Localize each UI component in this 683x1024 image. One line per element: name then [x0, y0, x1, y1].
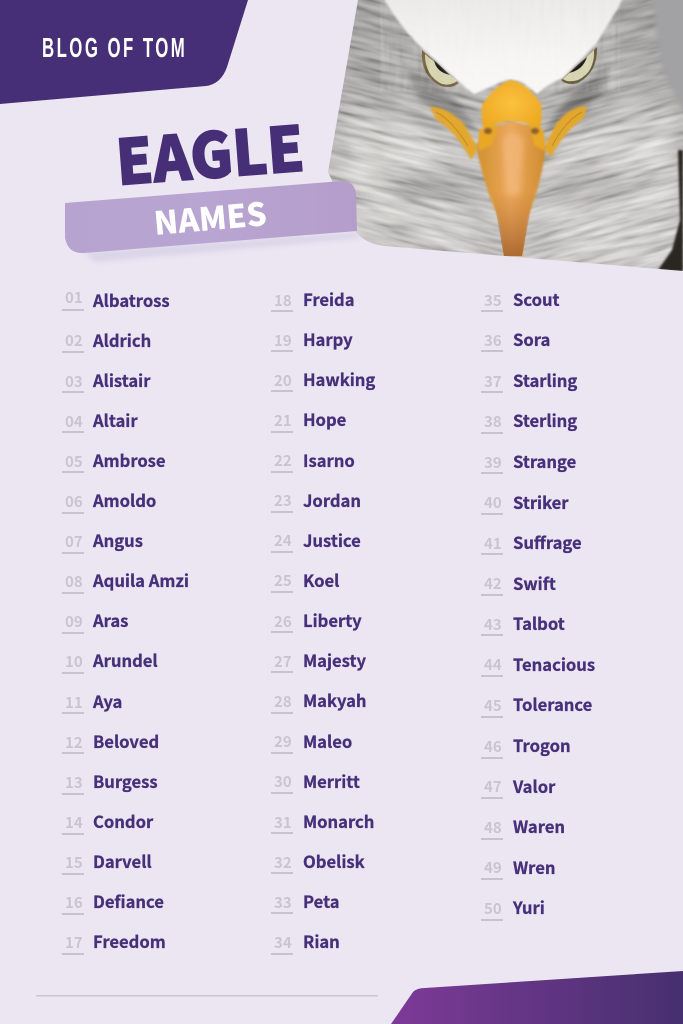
names column 2 — [271, 287, 375, 955]
name 10: 10 — [65, 651, 83, 672]
name 12: 12 — [65, 732, 83, 753]
name 19: 19 — [274, 330, 292, 351]
name 07 — [62, 528, 143, 554]
name 29: Maleo — [303, 729, 352, 753]
name 07: Angus — [92, 528, 143, 552]
header panel: blog brand — [0, 0, 248, 104]
dark feathers at right edge — [658, 150, 683, 272]
studio backdrop — [652, 0, 683, 116]
name 31: 31 — [274, 812, 292, 833]
name 31 — [271, 809, 374, 834]
name 28: Makyah — [303, 688, 367, 712]
name 06: Amoldo — [92, 488, 156, 512]
name 34: Rian — [303, 929, 340, 953]
name 38: Sterling — [513, 408, 577, 432]
name 02: 02 — [65, 330, 83, 351]
name 26: 26 — [274, 611, 292, 632]
name 39 — [481, 449, 576, 474]
name 01: Albatross — [92, 288, 170, 312]
name 45: Tolerance — [513, 692, 592, 716]
name 04 — [62, 408, 138, 433]
name 33: 33 — [274, 892, 292, 913]
name 32: 32 — [274, 852, 292, 873]
name 50: 50 — [484, 898, 502, 919]
name 05 — [62, 448, 166, 473]
name 32: Obelisk — [303, 849, 365, 873]
name 03 — [62, 368, 151, 393]
name 43: 43 — [484, 614, 502, 635]
name 17: Freedom — [93, 929, 166, 953]
name 24: 24 — [274, 530, 292, 551]
name 20 — [271, 367, 375, 392]
name 11 — [62, 689, 122, 714]
names column 1 — [62, 287, 189, 955]
name 35 — [481, 287, 560, 312]
name 50 — [481, 895, 545, 921]
name 29: 29 — [274, 731, 292, 752]
name 07: 07 — [65, 531, 83, 552]
name 25 — [271, 568, 339, 593]
names column 3 — [481, 287, 595, 921]
name 23 — [271, 488, 361, 513]
name 09: Aras — [92, 608, 128, 632]
name 47 — [481, 774, 556, 799]
name 48: 48 — [484, 817, 502, 838]
name 49: 49 — [484, 857, 502, 878]
name 32 — [271, 849, 365, 874]
name 17: 17 — [65, 932, 83, 953]
name 08 — [62, 568, 189, 594]
name 45: 45 — [484, 695, 502, 716]
name 40: 40 — [484, 492, 502, 513]
name 20: 20 — [274, 370, 292, 391]
name 49: Wren — [513, 855, 556, 879]
name 46 — [481, 733, 571, 759]
name 15: 15 — [65, 852, 83, 873]
name 03: Alistair — [92, 368, 151, 392]
name 16: Defiance — [93, 889, 164, 913]
name 39: 39 — [484, 452, 502, 473]
name 31: Monarch — [303, 809, 374, 833]
name 30: Merritt — [303, 769, 360, 793]
name 45 — [481, 692, 592, 718]
name 26: Liberty — [303, 608, 362, 632]
name 09 — [62, 608, 128, 634]
name 03: 03 — [65, 371, 83, 392]
name 14 — [62, 809, 154, 835]
white forehead cap — [380, 0, 626, 94]
brand text: BLOG OF TOM — [42, 32, 185, 63]
nostrils — [484, 128, 492, 134]
name 14: 14 — [65, 812, 83, 833]
name 42: 42 — [484, 573, 502, 594]
name 42: Swift — [513, 571, 556, 595]
name 16: 16 — [65, 892, 83, 913]
name 01 — [62, 287, 170, 312]
name 24: Justice — [303, 528, 361, 552]
name 04: 04 — [65, 411, 83, 432]
name 44 — [481, 652, 595, 677]
name 43: Talbot — [513, 611, 565, 635]
name 02: Aldrich — [92, 328, 151, 352]
name 25: Koel — [303, 568, 339, 592]
name 27: 27 — [274, 651, 292, 672]
name 05: Ambrose — [92, 448, 166, 472]
name 05: 05 — [65, 451, 83, 472]
name 28 — [271, 688, 367, 714]
left eye — [422, 50, 459, 87]
name 10: Arundel — [92, 648, 158, 672]
name 43 — [481, 611, 565, 636]
name 13 — [62, 769, 158, 795]
feather texture left — [328, 0, 513, 256]
name 21 — [271, 407, 346, 433]
name 13: 13 — [65, 772, 83, 793]
feather texture right — [513, 0, 683, 268]
name 42 — [481, 571, 556, 596]
name 30: 30 — [274, 771, 292, 792]
name 28: 28 — [274, 691, 292, 712]
footer panel — [391, 971, 683, 1024]
name 27: Majesty — [303, 648, 366, 672]
name 24 — [271, 528, 361, 553]
name 27 — [271, 648, 366, 673]
name 48 — [481, 814, 565, 840]
name 38 — [481, 408, 577, 434]
name 11: Aya — [92, 689, 122, 713]
name 13: Burgess — [93, 769, 158, 793]
name 08: 08 — [65, 571, 83, 592]
name 34 — [271, 929, 340, 955]
name 25: 25 — [274, 570, 292, 591]
name 11: 11 — [65, 692, 83, 713]
name 16 — [62, 889, 164, 915]
name 46: 46 — [484, 736, 502, 757]
name 22 — [271, 448, 355, 473]
name 44: 44 — [484, 654, 502, 675]
name 37: Starling — [513, 368, 577, 392]
beak — [477, 121, 545, 256]
name 35: 35 — [484, 290, 502, 311]
name 41 — [481, 530, 582, 555]
name 34: 34 — [274, 932, 292, 953]
name 14: Condor — [93, 809, 154, 833]
name 17 — [62, 929, 166, 955]
name 47: Valor — [512, 774, 556, 798]
banner: names — [65, 181, 357, 253]
name 38: 38 — [484, 411, 502, 432]
name 19: Harpy — [303, 327, 353, 351]
name 21: Hope — [303, 407, 346, 431]
name 23: Jordan — [303, 488, 361, 512]
name 10 — [62, 648, 158, 674]
name 41: Suffrage — [513, 530, 582, 554]
name 50: Yuri — [512, 895, 545, 919]
name 22: Isarno — [303, 448, 355, 472]
name 26 — [271, 608, 362, 633]
name 29 — [271, 729, 352, 754]
name 21: 21 — [274, 410, 292, 431]
name 06: 06 — [65, 491, 83, 512]
cere — [482, 80, 542, 132]
name 41: 41 — [484, 533, 502, 554]
banner shadow — [84, 232, 360, 262]
name 48: Waren — [513, 814, 565, 838]
title: eagle: EAGLE — [112, 99, 307, 203]
name 35: Scout — [513, 287, 560, 311]
name 18: Freida — [303, 287, 355, 311]
right eye — [561, 47, 597, 84]
name 08: Aquila Amzi — [92, 568, 189, 592]
yellow mouth lines — [430, 107, 478, 160]
name 12 — [62, 729, 159, 754]
name 18: 18 — [274, 290, 292, 311]
name 12: Beloved — [93, 729, 159, 753]
name 36: 36 — [484, 330, 502, 351]
name 23: 23 — [274, 490, 292, 511]
subtitle text: NAMES — [152, 189, 268, 245]
name 49 — [481, 855, 556, 880]
name 36 — [481, 327, 550, 352]
name 09: 09 — [65, 611, 83, 632]
name 37: 37 — [484, 371, 502, 392]
name 30 — [271, 769, 360, 794]
name 33: Peta — [303, 889, 340, 913]
name 15: Darvell — [93, 849, 152, 873]
name 04: Altair — [92, 408, 138, 432]
name 06 — [62, 488, 156, 514]
name 20: Hawking — [303, 367, 375, 391]
photo: bald eagle head — [328, 0, 683, 271]
name 47: 47 — [484, 776, 502, 797]
name 44: Tenacious — [513, 652, 595, 676]
name 33 — [271, 889, 340, 914]
name 37 — [481, 368, 577, 393]
name 15 — [62, 849, 152, 875]
name 22: 22 — [274, 450, 292, 471]
name 02 — [62, 328, 151, 353]
name 39: Strange — [513, 449, 576, 473]
name 46: Trogon — [513, 733, 571, 757]
name 36: Sora — [513, 327, 550, 351]
name 18 — [271, 287, 355, 312]
name 01: 01 — [65, 287, 83, 308]
name 40 — [481, 490, 569, 515]
name 40: Striker — [513, 490, 569, 514]
name 19 — [271, 327, 353, 352]
